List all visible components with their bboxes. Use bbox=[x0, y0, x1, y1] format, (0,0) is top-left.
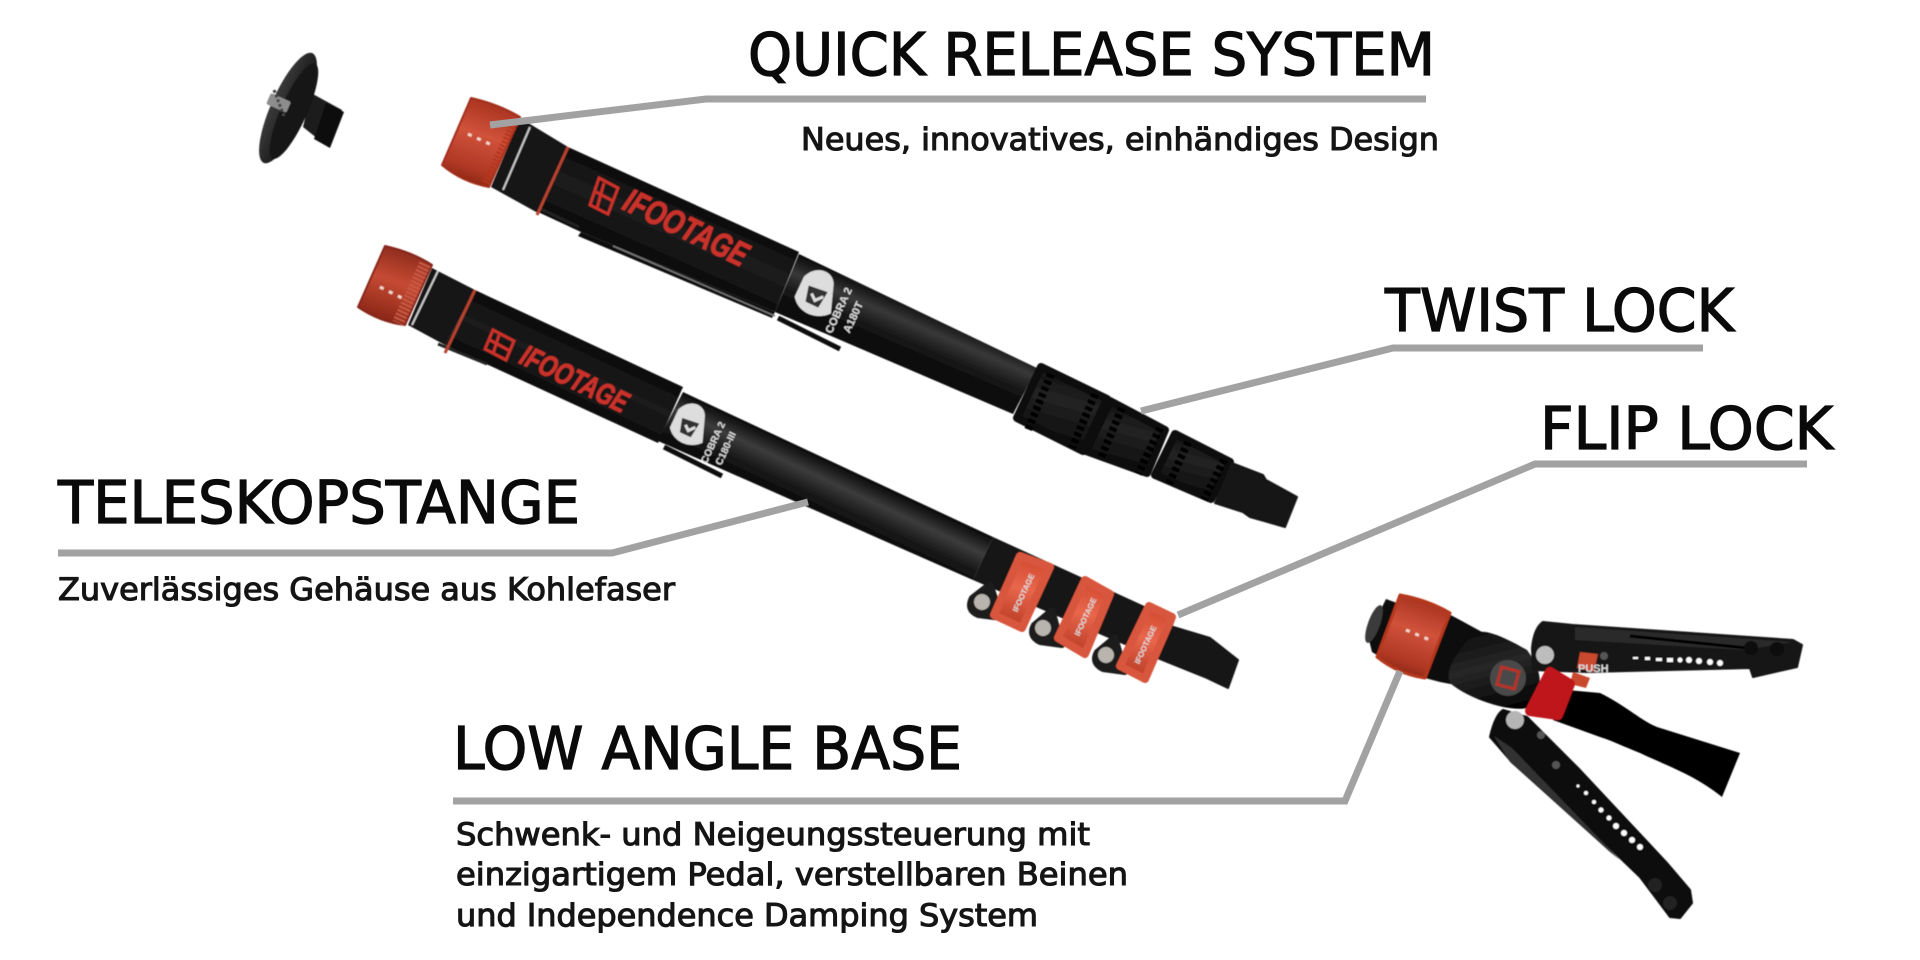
lower leg bbox=[1490, 710, 1692, 918]
neck bbox=[1425, 612, 1482, 690]
foam sleeve bbox=[538, 147, 799, 312]
push button bbox=[1570, 652, 1609, 688]
red hub cap bbox=[1530, 672, 1570, 715]
badge text: model name: A180T bbox=[841, 300, 866, 335]
text: low angle base description: Schwenk- und Neigeungssteuerung mit bbox=[456, 817, 1090, 853]
badge: cobra bbox=[791, 264, 846, 322]
sleeve clip bbox=[438, 344, 487, 364]
text: low angle base description: einzigartigem Pedal, verstellbaren Beinen bbox=[456, 857, 1128, 893]
text: low angle base description bbox=[456, 817, 1128, 934]
heading: twist lock: TWIST LOCK bbox=[1384, 276, 1735, 345]
leader: flip lock bbox=[1178, 464, 1807, 615]
clamp brand text bbox=[1011, 572, 1159, 666]
sleeve clip bbox=[528, 203, 840, 349]
icon: sleeve logo bbox=[590, 178, 618, 214]
red cap bbox=[1377, 595, 1450, 678]
red cap bbox=[442, 98, 520, 187]
monopod: flip lock model bbox=[358, 246, 1238, 688]
logo text: IFOOTAGE bbox=[617, 182, 755, 275]
collar bbox=[1368, 599, 1405, 660]
clamp brand text: IFOOTAGE bbox=[1073, 596, 1099, 638]
text: quick release description: Neues, innovatives, einhändiges Design bbox=[801, 122, 1439, 158]
upper leg bbox=[1532, 622, 1802, 677]
flip tabs bbox=[970, 584, 1125, 672]
foot bbox=[1215, 463, 1297, 527]
neck bbox=[408, 268, 475, 345]
heading: teleskopstange: TELESKOPSTANGE bbox=[57, 468, 580, 537]
badge text: model name: COBRA 2 bbox=[823, 286, 855, 336]
lock section bbox=[973, 537, 1175, 660]
icon: sleeve logo bbox=[485, 330, 514, 360]
heading: flip lock: FLIP LOCK bbox=[1540, 394, 1834, 463]
clamp brand text: IFOOTAGE bbox=[1133, 624, 1159, 666]
leader: low angle base bbox=[453, 671, 1400, 801]
logo text: IFOOTAGE bbox=[515, 339, 634, 420]
ball body bbox=[1449, 632, 1540, 709]
logo badge bbox=[1490, 660, 1526, 696]
badge text: model name bbox=[823, 286, 870, 342]
icon: quick release plate bbox=[248, 46, 344, 170]
heading: low angle base: LOW ANGLE BASE bbox=[453, 714, 962, 783]
leader: quick release bbox=[490, 99, 1426, 125]
neck bbox=[491, 118, 568, 213]
carbon tube bbox=[658, 392, 993, 580]
low angle base product bbox=[1362, 595, 1802, 918]
badge text: model name: C180-III bbox=[714, 430, 739, 467]
red cap bbox=[358, 246, 432, 325]
foot bbox=[1150, 626, 1238, 688]
text: teleskopstange description: Zuverlässiges Gehäuse aus Kohlefaser bbox=[58, 572, 675, 608]
leader: telescopic pole bbox=[58, 502, 808, 553]
badge text: model name: COBRA 2 bbox=[699, 420, 728, 465]
heading: quick release system: QUICK RELEASE SYSTEM bbox=[748, 20, 1435, 89]
text: low angle base description: und Independence Damping System bbox=[456, 898, 1038, 934]
foam sleeve bbox=[445, 290, 683, 443]
badge text: model name bbox=[699, 420, 741, 471]
clip bar bbox=[664, 447, 722, 476]
clamp brand text: IFOOTAGE bbox=[1011, 572, 1037, 614]
center leg bbox=[1553, 690, 1740, 797]
tube bbox=[775, 254, 1037, 414]
red flip clamps bbox=[994, 556, 1172, 679]
monopod: twist lock model bbox=[442, 98, 1297, 527]
twist locks bbox=[1017, 367, 1230, 500]
leader: twist lock bbox=[1141, 348, 1703, 411]
badge: cobra bbox=[666, 398, 716, 451]
push button: PUSH bbox=[1578, 663, 1609, 675]
